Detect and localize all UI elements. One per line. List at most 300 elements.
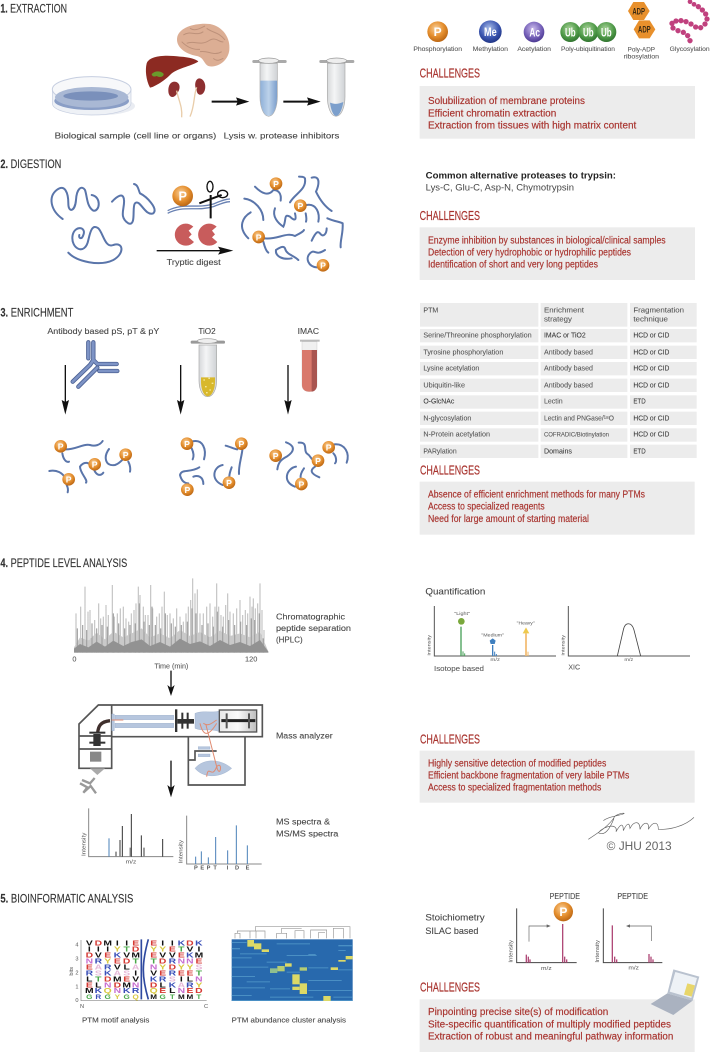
chart: sequence motif logo: I — [171, 939, 174, 947]
chart: sequence motif logo: K — [178, 939, 186, 947]
chart: isotope based: "Light" — [454, 611, 470, 617]
peptides: antibody enrichment — [49, 440, 132, 492]
intact proteins — [52, 184, 155, 263]
column: fragmentation technique: ETD — [633, 397, 646, 406]
chart: phosphorylated peptide spectrum: PEPTIDE — [550, 891, 580, 901]
chart: sequence motif logo: K — [123, 986, 131, 995]
column: fragmentation technique: HCD or CID — [633, 430, 669, 439]
label: chromatographic separation: Chromatographic — [276, 611, 345, 621]
chart: sequence motif logo: Q — [150, 986, 158, 995]
chart: sequence motif logo: I — [197, 945, 200, 953]
chart: sequence motif logo: 3 — [75, 957, 78, 963]
label: stoichiometry — [425, 913, 485, 936]
chart: sequence motif logo: V — [186, 945, 193, 953]
chart: sequence motif logo: N — [114, 986, 121, 995]
chart: sequence motif logo: Q — [104, 986, 112, 995]
peptides: TiO2 enrichment: P — [184, 485, 190, 495]
phosphorylation: Phosphorylation — [413, 46, 463, 53]
chart: heat map — [232, 939, 353, 1001]
chart: sequence motif logo: D — [114, 981, 122, 989]
peptides: IMAC enrichment: P — [326, 443, 332, 453]
panel: peptide analysis challenges — [420, 733, 695, 853]
peptides: antibody enrichment: P — [66, 475, 72, 485]
chart: sequence motif logo: M — [178, 994, 185, 1001]
chart: sequence motif logo: C — [204, 1004, 208, 1010]
table header: technique — [633, 314, 668, 323]
icon: brain — [177, 24, 229, 66]
chart: sequence motif logo: N — [195, 975, 203, 983]
chart: sequence motif logo: G — [124, 994, 130, 1001]
chart: sequence motif logo: Y — [159, 945, 166, 953]
chart: sequence motif logo: V — [159, 951, 166, 959]
chart: sequence motif logo: A — [95, 963, 103, 971]
chart: sequence motif logo: D — [104, 975, 112, 983]
text: alternative proteases: Common alternative proteases to trypsin: — [426, 170, 616, 180]
table header: strategy — [544, 314, 572, 323]
chart: sequence motif logo: T — [170, 994, 176, 1001]
panel: bioinformatic challenges — [420, 969, 699, 1052]
chart: sequence motif logo: E — [123, 975, 130, 983]
label: MS spectra: MS spectra & — [276, 817, 330, 827]
chart: unmodified peptide spectrum — [595, 891, 662, 971]
chart: isotope based: "Medium" — [481, 633, 504, 639]
chart: sequence motif logo: K — [114, 951, 122, 959]
caption: motif analysis: PTM motif analysis — [82, 1015, 150, 1024]
column: enrichment strategy: COFRADIC/Biotinylation — [544, 433, 609, 439]
box — [420, 999, 695, 1052]
challenge list: Site-specific quantification of multiply modified peptides — [428, 1019, 671, 1030]
chart: sequence motif logo: D — [186, 939, 194, 947]
chart: sequence motif logo: 0 — [75, 998, 78, 1004]
chart: sequence motif logo: Y — [150, 945, 157, 953]
chart: sequence motif logo: L — [124, 963, 130, 971]
analyzer housing — [79, 705, 262, 785]
chart: sequence motif logo: E — [86, 981, 93, 989]
chart tick: 0: 0 — [72, 654, 76, 663]
chart: MS/MS spectrum: E — [200, 865, 204, 871]
chart: sequence motif logo: I — [88, 945, 91, 953]
box — [420, 227, 695, 280]
table header — [423, 305, 684, 323]
label: MS spectra: MS/MS spectra — [276, 829, 339, 839]
arrow — [157, 247, 233, 255]
chart: sequence motif logo: M — [195, 951, 203, 959]
challenge list: Pinpointing precise site(s) of modification — [428, 1007, 608, 1018]
chart: sequence motif logo: Y — [115, 994, 120, 1001]
challenge list: Enzyme inhibition by substances in biological/clinical samples — [428, 235, 666, 246]
poly-ubiquitination: Ub — [601, 25, 612, 39]
chart tick: 120: 120 — [245, 654, 257, 663]
challenge list: Absence of efficient enrichment methods for many PTMs — [428, 489, 645, 500]
column: enrichment strategy: IMAC or TiO2 — [544, 331, 586, 340]
chart: sequence motif logo: I — [180, 975, 183, 983]
chart: sequence motif logo: E — [195, 957, 202, 965]
column: enrichment strategy — [544, 331, 614, 455]
chart: sequence motif logo: V — [114, 963, 121, 971]
arrow — [177, 365, 184, 415]
chart: sequence motif logo: N — [178, 957, 185, 965]
chart: sequence motif logo: N — [186, 957, 194, 965]
chart: sequence motif logo: D — [195, 986, 203, 995]
label: MS spectra — [276, 817, 339, 839]
column: PTM: O-GlcNAc — [423, 397, 455, 406]
acetylation: Acetylation — [517, 46, 552, 53]
label: isotope based: Isotope based — [434, 664, 484, 673]
chart: sequence motif logo: 4 — [75, 943, 78, 949]
chart: sequence motif logo: R — [159, 975, 167, 983]
methylation: Me — [484, 25, 497, 39]
column: PTM: PARylation — [423, 446, 457, 455]
chart: sequence motif logo: T — [124, 945, 130, 953]
chart: sequence motif logo: R — [95, 994, 101, 1001]
arrow — [167, 761, 175, 797]
heading: 4. Peptide level analysis: 4. PEPTIDE LEVEL ANALYSIS — [0, 556, 127, 570]
chart: sequence motif logo: 2 — [75, 971, 78, 977]
heading: CHALLENGES — [420, 67, 480, 81]
chart: sequence motif logo: E — [178, 951, 185, 959]
peptides: antibody enrichment: P — [58, 442, 64, 452]
arrow — [284, 365, 292, 415]
label: chromatographic separation: (HPLC) — [276, 634, 303, 644]
chart: sequence motif logo: N — [104, 981, 111, 989]
chart: sequence motif logo: E — [186, 969, 193, 977]
label: chromatographic separation: peptide separation — [276, 623, 351, 633]
chart: sequence motif logo: R — [86, 969, 94, 977]
chart: MS spectrum: Intensity — [81, 832, 87, 856]
label: stoichiometry: SILAC based — [425, 926, 478, 936]
diagram: mass analyzer instrument — [79, 705, 262, 793]
chart: sequence motif logo: bits — [69, 967, 75, 976]
ion bend and lenses — [98, 721, 110, 733]
detector icon — [80, 778, 96, 793]
label: TiO2: TiO2 — [198, 326, 216, 336]
chart: sequence motif logo: Y — [114, 945, 121, 953]
column: PTM — [423, 331, 532, 455]
chart: sequence motif logo: I — [106, 945, 109, 953]
chart: sequence motif logo: N — [86, 957, 93, 965]
chart: isotope based: Intensity — [427, 634, 433, 656]
panel: enrichment challenges — [420, 463, 695, 535]
signature — [588, 813, 694, 839]
panel: quantification — [425, 587, 690, 673]
column: fragmentation technique: ETD — [633, 446, 646, 455]
chart: isotope based — [427, 606, 556, 663]
chart: sequence motif logo: V — [169, 951, 176, 959]
challenge list: Efficient backbone fragmentation of very labile PTMs — [428, 770, 629, 781]
chart: sequence motif logo: D — [95, 939, 103, 947]
chart: sequence motif logo: V — [150, 969, 157, 977]
column: enrichment strategy: Domains — [544, 446, 572, 455]
chart: sequence motif logo: Y — [186, 963, 193, 971]
label: chromatographic separation — [276, 611, 351, 644]
copyright: © JHU 2013 — [607, 840, 672, 853]
chart: phosphorylated peptide spectrum: P — [559, 905, 567, 919]
chart: sequence motif logo: R — [132, 986, 140, 995]
chart: sequence motif logo: D — [123, 957, 131, 965]
chart: sequence motif logo: A — [114, 969, 122, 977]
chart: phosphorylated peptide spectrum: Intensity — [509, 940, 515, 963]
text: alternative proteases — [426, 170, 616, 192]
chart: MS spectrum — [81, 808, 173, 865]
column: PTM: Ubiquitin-like — [423, 380, 465, 389]
icon: antibody — [73, 342, 117, 387]
peptides: TiO2 enrichment: P — [238, 439, 244, 449]
chart: sequence motif logo: L — [95, 981, 102, 989]
chart: sequence motif logo: V — [95, 951, 102, 959]
chart: sequence motif logo: Q — [133, 994, 139, 1001]
challenge list: Identification of short and very long peptides — [428, 259, 598, 270]
phosphorylation — [413, 21, 463, 53]
phosphorylation: P — [434, 25, 442, 39]
chart: sequence motif logo: G — [86, 994, 93, 1001]
chart: unmodified peptide spectrum: m/z — [628, 965, 639, 971]
chart: MS/MS spectrum: Intensity — [179, 840, 185, 863]
peptides: antibody enrichment: P — [92, 460, 98, 470]
chart: sequence motif logo: L — [187, 975, 194, 983]
column: enrichment strategy: Lectin — [544, 397, 563, 406]
digested peptide fragments: P — [297, 201, 303, 211]
chart: sequence motif logo: I — [116, 939, 119, 947]
chart: sequence motif logo: S — [123, 969, 130, 977]
heading: CHALLENGES — [420, 981, 480, 995]
digested peptide fragments — [242, 177, 343, 272]
chart: sequence motif logo: 1 — [75, 985, 78, 991]
heading: 1. Extraction: 1. EXTRACTION — [0, 2, 67, 16]
chart: unmodified peptide spectrum: Intensity — [595, 940, 601, 963]
challenge list: Efficient chromatin extraction — [428, 108, 556, 119]
column: fragmentation technique: HCD or CID — [633, 380, 669, 389]
heading: Quantification — [425, 587, 485, 597]
section 5: bioinformatic analysis — [0, 892, 353, 1024]
chart: sequence motif logo: T — [196, 994, 202, 1001]
chart: sequence motif logo: M — [103, 939, 112, 947]
chart: sequence motif logo: T — [196, 969, 203, 977]
column: PTM: Lysine acetylation — [423, 364, 479, 373]
chart: sequence motif logo: T — [95, 975, 102, 983]
table: PTM enrichment strategies — [420, 303, 697, 458]
digested peptide fragments: P — [273, 179, 279, 189]
arrow — [62, 365, 69, 415]
chart: sequence motif logo: V — [123, 951, 130, 959]
chart: MS/MS spectrum: E — [246, 865, 250, 871]
column: PTM: Tyrosine phosphorylation — [423, 347, 503, 356]
challenge list: Access to specialized reagents — [428, 502, 545, 513]
heading: 5. Bioinformatic analysis: 5. BIOINFORMATIC ANALYSIS — [0, 892, 133, 906]
caption: tryptic digest: Tryptic digest — [167, 257, 221, 267]
chart: sequence motif logo: V — [86, 939, 93, 947]
chart: sequence motif logo: R — [186, 981, 194, 989]
chart: sequence motif logo: N — [132, 981, 139, 989]
heading: CHALLENGES — [420, 463, 480, 477]
acetylation — [517, 22, 552, 53]
chart: sequence motif logo: S — [195, 963, 202, 971]
glycosylation: Glycosylation — [670, 46, 710, 53]
box — [420, 482, 695, 535]
heading: 3. Enrichment: 3. ENRICHMENT — [0, 305, 74, 319]
chart: sequence motif logo: E — [159, 969, 166, 977]
chart: sequence motif logo: Y — [159, 963, 166, 971]
challenge list: Access to specialized fragmentation methods — [428, 783, 601, 794]
chart: sequence motif logo: N — [150, 963, 157, 971]
PTM type icon legend — [413, 0, 710, 61]
chart: MS/MS spectrum: D — [235, 865, 239, 871]
chart: sequence motif logo: D — [159, 957, 167, 965]
poly-ubiquitination: Poly-ubiquitination — [561, 46, 615, 53]
caption: biological sample: Biological sample (cell line or organs) — [55, 130, 217, 140]
peptides: TiO2 enrichment: P — [226, 478, 232, 488]
chart: MS/MS spectrum: I — [227, 865, 229, 871]
poly-ubiquitination: Ub — [565, 25, 576, 39]
chart: unmodified peptide spectrum: PEPTIDE — [617, 891, 648, 901]
icon: lysis tube — [252, 58, 287, 116]
challenge list: Solubilization of membrane proteins — [428, 96, 585, 107]
arrow — [212, 97, 249, 106]
poly-ADP ribosylation: ADP — [638, 25, 651, 35]
glycosylation — [669, 0, 710, 53]
digested peptide fragments: P — [256, 232, 262, 242]
icon: liver — [146, 56, 198, 88]
column: PTM: N-glycosylation — [423, 413, 471, 422]
panel: extraction challenges — [420, 67, 695, 139]
heading: CHALLENGES — [420, 733, 480, 747]
chart: sequence motif logo: E — [178, 969, 185, 977]
chart: dendrogram — [235, 927, 350, 938]
column: fragmentation technique: HCD or CID — [633, 347, 669, 356]
icon: TiO2 tube — [191, 339, 225, 397]
poly-ADP ribosylation — [624, 2, 660, 61]
table cell backgrounds — [420, 303, 697, 458]
chart: sequence motif logo: M — [187, 994, 193, 1001]
label: IMAC: IMAC — [298, 326, 319, 336]
chart: sequence motif logo — [69, 939, 208, 1010]
arrow — [283, 97, 321, 106]
chart: sequence motif logo: Y — [104, 957, 111, 965]
chart: sequence motif logo: K — [104, 969, 112, 977]
chart: sequence motif logo: V — [132, 975, 139, 983]
chart: MS/MS spectrum — [179, 816, 262, 871]
chart: sequence motif logo: K — [195, 939, 203, 947]
peptides: TiO2 enrichment — [180, 437, 248, 496]
chart: sequence motif logo: D — [132, 945, 140, 953]
table header: PTM — [423, 305, 438, 314]
chart: sequence motif logo: E — [114, 957, 121, 965]
column: fragmentation technique — [633, 331, 669, 455]
challenge list: Detection of very hydrophobic or hydrophilic peptides — [428, 247, 631, 258]
text: alternative proteases: Lys-C, Glu-C, Asp-N, Chymotrypsin — [426, 182, 574, 192]
poly-ubiquitination — [560, 22, 616, 53]
chart: sequence motif logo: Y — [178, 963, 185, 971]
peptides: IMAC enrichment: P — [315, 456, 321, 466]
column: fragmentation technique: HCD or CID — [633, 413, 669, 422]
challenge list: Extraction from tissues with high matrix content — [428, 121, 637, 132]
chart: sequence motif logo: G — [105, 994, 111, 1001]
ion path — [112, 720, 221, 777]
label: antibody: Antibody based pS, pT & pY — [47, 326, 160, 336]
chart: sequence motif logo: R — [95, 957, 103, 965]
panel: stoichiometry — [425, 891, 662, 972]
chart: sequence motif logo: E — [150, 939, 157, 947]
chart: sequence motif logo: D — [169, 963, 177, 971]
chart: sequence motif logo: E — [159, 986, 166, 995]
axis label: time: Time (min) — [154, 662, 188, 671]
chart: sequence motif logo: E — [169, 945, 176, 953]
section 1: extraction illustration — [0, 2, 354, 140]
label: stoichiometry: Stoichiometry — [425, 913, 485, 923]
column: fragmentation technique: HCD or CID — [633, 331, 669, 340]
chart: sequence motif logo: I — [161, 939, 164, 947]
chart: sequence motif logo: E — [104, 951, 111, 959]
heading: CHALLENGES — [420, 209, 480, 223]
chart: sequence motif logo: T — [151, 957, 157, 965]
chart: sequence motif logo: I — [97, 945, 100, 953]
chart: XIC: m/z — [624, 657, 634, 663]
chart: sequence motif logo: D — [86, 951, 94, 959]
challenge list — [428, 1007, 673, 1043]
chart: sequence motif logo: L — [160, 981, 166, 989]
peptides: IMAC enrichment: P — [298, 479, 304, 489]
chart: XIC — [561, 606, 690, 663]
chart: sequence motif logo: A — [178, 981, 186, 989]
chart: sequence motif logo: M — [85, 986, 94, 995]
peptides: antibody enrichment: P — [123, 450, 129, 460]
chart: sequence motif logo: L — [169, 986, 176, 995]
poly-ADP ribosylation: Poly-ADP — [628, 47, 655, 54]
column: enrichment strategy: Antibody based — [544, 380, 593, 389]
caption: lysis: Lysis w. protease inhibitors — [224, 130, 339, 140]
poly-ubiquitination: Ub — [583, 25, 594, 39]
chart: isotope based: "Heavy" — [517, 620, 535, 626]
chart: sequence motif logo: N — [80, 1004, 84, 1010]
chart: sequence motif logo: I — [134, 969, 137, 977]
column: enrichment strategy: Antibody based — [544, 364, 593, 373]
peptides: IMAC enrichment: P — [273, 451, 279, 461]
chart: sequence motif logo: T — [133, 957, 139, 965]
chart: sequence motif logo: M — [150, 994, 157, 1001]
challenge list — [428, 758, 629, 794]
methylation — [473, 20, 509, 53]
column: PTM: Serine/Threonine phosphorylation — [423, 331, 532, 340]
orbitrap chamber — [219, 710, 257, 732]
chart: sequence motif logo: S — [169, 975, 176, 983]
chart: phosphorylated peptide spectrum — [509, 891, 580, 972]
chart: sequence motif logo: T — [178, 945, 185, 953]
box — [420, 86, 695, 139]
chart: sequence motif logo: E — [132, 939, 139, 947]
acetylation: Ac — [529, 25, 540, 39]
peptides: IMAC enrichment — [269, 441, 348, 490]
column: enrichment strategy: Antibody based — [544, 347, 593, 356]
chart: sequence motif logo: E — [186, 986, 193, 995]
icon: IMAC tube — [300, 340, 320, 392]
challenge list — [428, 235, 666, 270]
chart: phosphorylated peptide spectrum: m/z — [541, 966, 552, 972]
challenge list — [428, 96, 637, 132]
arrow — [167, 671, 175, 696]
panel: digestion challenges — [420, 209, 695, 280]
icon: kidneys — [168, 78, 205, 117]
table header: Enrichment — [544, 305, 584, 314]
column: enrichment strategy: Lectin and PNGase/¹⁸O — [544, 413, 614, 422]
chart: sequence motif logo: M — [113, 975, 122, 983]
digested peptide fragments: P — [320, 261, 326, 271]
chart: sequence motif logo: L — [86, 975, 93, 983]
chart: MS/MS spectrum: P — [207, 865, 211, 871]
chart: sequence motif logo: G — [160, 994, 166, 1001]
chart: sequence motif logo: M — [122, 981, 131, 989]
icon: P ball: P — [178, 189, 187, 203]
chart: isotope based: m/z — [490, 657, 501, 663]
label: mass analyzer: Mass analyzer — [276, 731, 333, 741]
